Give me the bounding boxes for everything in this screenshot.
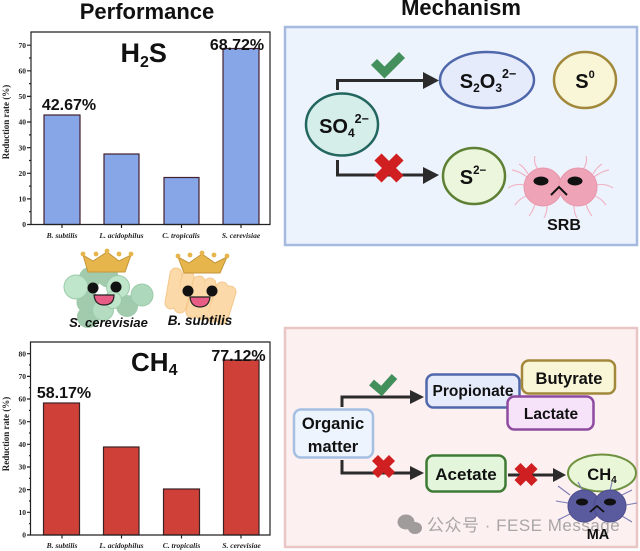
y axis tick labels: CH4 chart [18, 349, 26, 540]
face [182, 286, 194, 296]
node: SO4 2-: 4 [348, 126, 355, 140]
label: S. cerevisiae: S. cerevisiae [69, 315, 148, 330]
crown [83, 252, 131, 272]
mascot: B. subtilis [171, 251, 230, 318]
crown [178, 254, 227, 273]
category labels: H2S chart: L. acidophilus [98, 231, 144, 240]
watermark: WeChat official account: 公众号 · FESE Message [427, 516, 620, 535]
y axis tick labels: H2S chart: 20 [18, 169, 26, 178]
box: organic matter: matter [308, 438, 359, 456]
y axis tick labels: CH4 chart: 50 [18, 417, 26, 426]
value label: 68.72%: 68.72% [210, 37, 264, 54]
y axis title: H2S chart: Reduction rate (%) [1, 85, 11, 159]
y axis tick labels: H2S chart [18, 41, 26, 229]
node: SO4 2-: 2− [355, 112, 369, 126]
value label: 42.67%: 42.67% [42, 97, 96, 114]
category labels: H2S chart: S. cerevisiae [222, 231, 261, 240]
y axis tick labels: H2S chart: 0 [22, 220, 26, 229]
node: S2O3 2-: 3 [495, 81, 502, 95]
value label: 77.12%: 77.12% [211, 348, 266, 365]
arrow: organic matter to propionate [342, 390, 424, 407]
arrow: organic matter to acetate [342, 460, 424, 480]
category labels: H2S chart [46, 231, 261, 240]
panel background [285, 328, 637, 547]
node: S2-: S [460, 167, 473, 189]
node: S2O3 2-: 2− [502, 67, 516, 81]
box: acetate [426, 456, 506, 492]
icon: red cross [378, 157, 400, 179]
yeast cells [64, 267, 153, 328]
category labels: CH4 chart: L. acidophilus [98, 541, 144, 550]
bars: CH4 [44, 360, 259, 535]
label: MA: MA [587, 527, 610, 543]
face [88, 282, 98, 294]
panel: H2S mechanism [285, 27, 637, 245]
arrow: acetate to CH4 [508, 468, 566, 482]
node: CH4: CH [587, 466, 611, 484]
node: S2O3 2- [440, 52, 534, 108]
node: CH4 [568, 454, 636, 492]
bar chart: H2S reduction rate [1, 32, 270, 240]
box: lactate: Lactate [524, 406, 579, 423]
y axis tick labels: H2S chart: 10 [18, 194, 26, 204]
category labels: CH4 chart: S. cerevisiae [222, 541, 261, 550]
node: CH4: 4 [611, 475, 617, 486]
y axis title: CH4 chart: Reduction rate (%) [1, 397, 11, 471]
category labels: CH4 chart: C. tropicalis [163, 541, 200, 550]
icon: red cross 1 [375, 458, 392, 475]
box: lactate [508, 396, 594, 430]
box: propionate: Propionate [433, 383, 514, 400]
node: S2-: 2− [473, 165, 487, 177]
icon: green check [372, 376, 394, 391]
node: S0: 0 [589, 69, 595, 81]
y axis tick labels: H2S chart: 40 [18, 118, 26, 127]
value label: 58.17%: 58.17% [37, 385, 91, 402]
arrow: SO4 to S2- [338, 160, 439, 184]
y axis tick labels: CH4 chart: 20 [18, 485, 26, 494]
node: S0: S [575, 71, 589, 93]
category labels: H2S chart: B. subtilis [46, 231, 77, 240]
axes: CH4 chart [30, 342, 270, 535]
chart title: H2S: S [149, 38, 167, 68]
panel: CH4 mechanism [285, 328, 637, 547]
mascot: S. cerevisiae [64, 249, 153, 328]
category labels: CH4 chart: B. subtilis [46, 541, 77, 550]
node: S2O3 2-: S [460, 71, 473, 93]
node: S2- [443, 148, 505, 204]
category labels: H2S chart: C. tropicalis [162, 231, 200, 240]
y axis tick labels: CH4 chart: 60 [18, 395, 26, 404]
y axis tick labels: CH4 chart: 40 [18, 440, 26, 449]
category labels: CH4 chart [46, 541, 261, 550]
y axis tick labels: CH4 chart: 70 [18, 372, 26, 381]
axes: H2S chart [31, 32, 270, 224]
chart title: H2S: H [120, 38, 140, 68]
rod cells [171, 274, 230, 318]
icon: SRB bacterium [508, 156, 613, 218]
y axis tick labels: H2S chart: 30 [18, 144, 26, 152]
node: SO4 2- [306, 94, 378, 156]
box: organic matter [294, 410, 373, 458]
box: butyrate [522, 360, 615, 394]
bar chart: CH4 reduction rate [1, 342, 270, 550]
y axis tick labels: CH4 chart: 0 [22, 530, 26, 540]
y axis tick labels: H2S chart: 50 [18, 92, 26, 101]
label: SRB: SRB [547, 217, 581, 234]
node: S2O3 2-: O [480, 71, 495, 93]
icon: WeChat bubbles [398, 514, 422, 534]
y axis tick labels: CH4 chart: 30 [18, 463, 26, 472]
icon: MA bacterium [556, 482, 637, 522]
y axis tick labels: CH4 chart: 80 [18, 349, 26, 358]
chart title: H2S: 2 [140, 54, 149, 71]
chart title: CH4: CH [131, 347, 169, 377]
chart title: CH4: 4 [169, 362, 178, 379]
y axis tick labels: H2S chart: 60 [18, 66, 26, 76]
node: S0 [554, 52, 616, 108]
box: butyrate: Butyrate [536, 370, 602, 388]
icon: red cross 2 [518, 466, 534, 483]
y axis tick labels: CH4 chart: 10 [18, 508, 26, 517]
label: B. subtilis: B. subtilis [168, 313, 233, 328]
node: SO4 2-: SO [319, 116, 348, 138]
bars: H2S [44, 48, 259, 224]
y axis tick labels: H2S chart: 70 [18, 41, 26, 50]
arrow: SO4 to S2O3 [338, 72, 439, 90]
box: organic matter: Organic [302, 415, 364, 433]
icon: green check [374, 55, 402, 72]
box: acetate: Acetate [435, 465, 497, 484]
panel background [285, 27, 637, 245]
box: propionate [426, 374, 520, 408]
node: S2O3 2-: 2 [473, 81, 480, 95]
